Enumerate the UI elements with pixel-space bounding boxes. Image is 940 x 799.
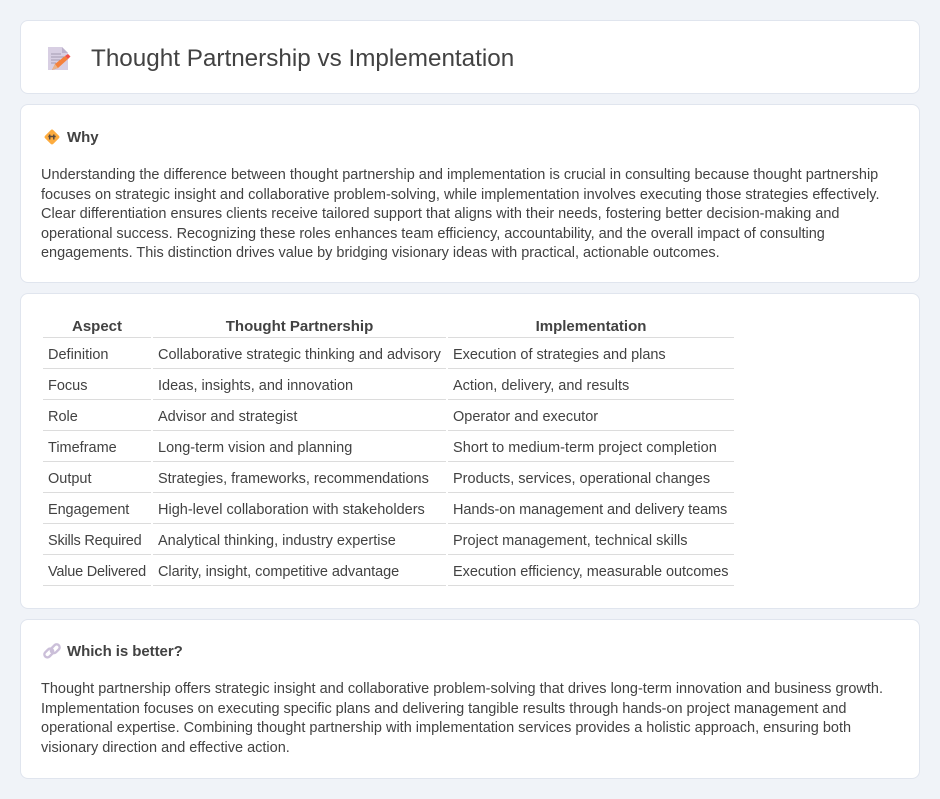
table: comparison: Clarity, insight, competitive advantage — [158, 564, 399, 580]
table: comparison: Hands-on management and delivery teams — [453, 502, 727, 518]
table: comparison: Implementation — [536, 318, 646, 335]
text block: why: Clear differentiation ensures clients receive tailored support that aligns with their needs, fostering better decision-making and — [41, 206, 839, 222]
text block: which is better: operational expertise. Combining thought partnership with implementation services provides a holistic approach, ensuring both — [41, 720, 851, 736]
text block: which is better: visionary direction and effective action. — [41, 740, 290, 756]
table: comparison: Execution of strategies and plans — [453, 347, 666, 363]
table: comparison: Project management, technical skills — [453, 533, 688, 549]
table: comparison: Analytical thinking, industry expertise — [158, 533, 396, 549]
icon: diamond sign — [44, 130, 60, 144]
icon: document with pencil — [48, 47, 70, 70]
table: comparison: Thought Partnership — [226, 318, 373, 335]
table: comparison: Skills Required — [48, 533, 141, 549]
text block: which is better — [41, 681, 883, 756]
table: comparison: Engagement — [48, 502, 129, 518]
panel: which is better — [20, 619, 920, 779]
table: comparison: Value Delivered — [48, 564, 146, 580]
heading: which is better: Which is better? — [67, 643, 183, 660]
icon: chain link — [43, 643, 61, 659]
table: comparison: Timeframe — [48, 440, 117, 456]
panel: title card — [20, 20, 920, 94]
table: comparison: Advisor and strategist — [158, 409, 297, 425]
text block: why: Understanding the difference between thought partnership and implementation is crucial in consulting because thought partnership — [41, 167, 878, 183]
table: comparison: Action, delivery, and results — [453, 378, 629, 394]
text block: why: engagements. This distinction drives value by bridging visionary ideas with practical, actionable outcomes. — [41, 245, 720, 261]
table: comparison: Long-term vision and planning — [158, 440, 352, 456]
text block: why: focuses on strategic insight and collaborative problem-solving, while implementation involves executing those strategies effectively. — [41, 187, 880, 203]
table: comparison: Execution efficiency, measurable outcomes — [453, 564, 728, 580]
table: comparison: Aspect — [72, 318, 122, 335]
title: Thought Partnership vs Implementation — [91, 45, 514, 72]
panel: comparison table — [20, 293, 920, 609]
table: comparison: Definition — [48, 347, 108, 363]
heading: why: Why — [67, 129, 98, 146]
panel: why — [20, 104, 920, 283]
table: comparison: Strategies, frameworks, recommendations — [158, 471, 429, 487]
table: comparison: Short to medium-term project completion — [453, 440, 717, 456]
table: comparison: High-level collaboration with stakeholders — [158, 502, 425, 518]
table: comparison: Collaborative strategic thinking and advisory — [158, 347, 441, 363]
text block: which is better: Implementation focuses on executing specific plans and delivering tangible results through hands-on project management and — [41, 701, 846, 717]
text block: which is better: Thought partnership offers strategic insight and collaborative problem-solving that drives long-term innovation and business growth. — [41, 681, 883, 697]
text block: why — [41, 167, 880, 261]
table: comparison: Ideas, insights, and innovation — [158, 378, 353, 394]
table: comparison: Focus — [48, 378, 88, 394]
table: comparison: Products, services, operational changes — [453, 471, 710, 487]
table: comparison: Output — [48, 471, 92, 487]
text block: why: operational success. Recognizing these roles enhances team efficiency, accountability, and the overall impact of consulting — [41, 226, 825, 242]
table: comparison: Operator and executor — [453, 409, 598, 425]
table: comparison: Role — [48, 409, 78, 425]
